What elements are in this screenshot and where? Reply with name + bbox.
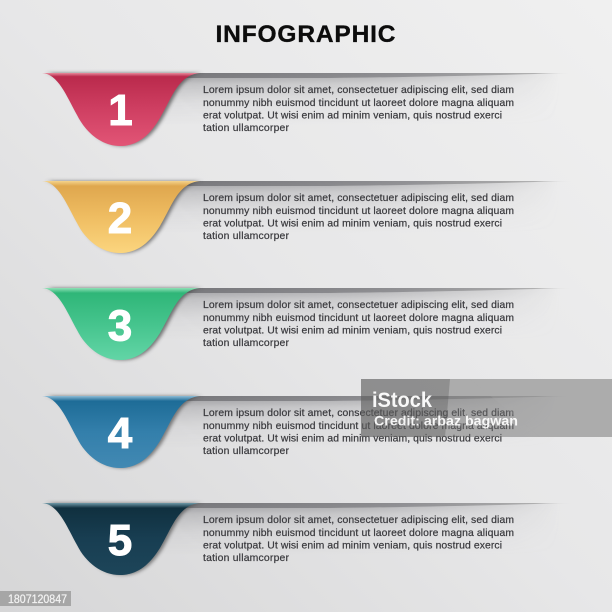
body text: tation ullamcorper [203, 553, 290, 564]
body text: erat volutpat. Ut wisi enim ad minim veniam, quis nostrud exerci [203, 110, 502, 122]
panel: step 3 [42, 288, 574, 360]
number: 2 [108, 194, 132, 243]
number: 5 [108, 516, 132, 565]
body text: Lorem ipsum dolor sit amet, consectetuer adipiscing elit, sed diam [203, 515, 514, 526]
tab shadow [45, 503, 203, 575]
body text: erat volutpat. Ut wisi enim ad minim veniam, quis nostrud exerci [203, 218, 502, 230]
body text [203, 515, 514, 564]
shadow band [172, 181, 561, 216]
body text: nonummy nibh euismod tincidunt ut laoreet dolore magna aliquam [203, 98, 514, 109]
body text: tation ullamcorper [203, 338, 290, 349]
panel: step 5 [42, 503, 574, 575]
body text [203, 85, 514, 134]
body text: erat volutpat. Ut wisi enim ad minim veniam, quis nostrud exerci [203, 434, 502, 444]
watermark: iStock credit: Credit: arbaz bagwan [374, 412, 518, 428]
tab: red [42, 73, 200, 146]
image id tag: 1807120847 [8, 594, 67, 606]
tab shadow [45, 396, 203, 468]
body text: tation ullamcorper [203, 123, 290, 134]
body text [203, 408, 514, 457]
tab: yellow [42, 181, 200, 253]
body text: Lorem ipsum dolor sit amet, consectetuer adipiscing elit, sed diam [203, 408, 514, 419]
body text: erat volutpat. Ut wisi enim ad minim veniam, quis nostrud exerci [203, 326, 502, 336]
shadow band [171, 73, 561, 108]
body text: nonummy nibh euismod tincidunt ut laoreet dolore magna aliquam [203, 528, 514, 539]
title: INFOGRAPHIC [216, 21, 396, 48]
tab shadow [45, 181, 203, 253]
panel: step 1 [42, 73, 574, 146]
body text: Lorem ipsum dolor sit amet, consectetuer adipiscing elit, sed diam [203, 85, 514, 96]
shadow band [172, 503, 560, 536]
body text: nonummy nibh euismod tincidunt ut laoreet dolore magna aliquam [203, 206, 514, 217]
number: 4 [108, 409, 133, 458]
panel: step 4 [42, 396, 574, 468]
tab: green [42, 288, 200, 360]
body text: tation ullamcorper [203, 446, 290, 457]
shadow band [172, 396, 554, 430]
number: 3 [108, 302, 132, 350]
tab: navy [42, 503, 200, 575]
panel: step 2 [42, 181, 574, 253]
tab shadow [45, 288, 203, 360]
body text: erat volutpat. Ut wisi enim ad minim veniam, quis nostrud exerci [203, 540, 502, 552]
body text: nonummy nibh euismod tincidunt ut laoreet dolore magna aliquam [203, 313, 514, 324]
watermark: iStock credit [361, 379, 612, 437]
shadow band [172, 288, 560, 324]
watermark: iStock credit: iStock [372, 389, 432, 412]
body text: nonummy nibh euismod tincidunt ut laoreet dolore magna aliquam [203, 421, 514, 432]
body text [203, 300, 514, 349]
tab: blue [42, 396, 200, 468]
number: 1 [108, 86, 133, 135]
body text: Lorem ipsum dolor sit amet, consectetuer adipiscing elit, sed diam [203, 193, 514, 204]
body text: tation ullamcorper [203, 231, 290, 242]
body text [203, 193, 514, 242]
body text: Lorem ipsum dolor sit amet, consectetuer adipiscing elit, sed diam [203, 300, 514, 311]
tab shadow [45, 73, 203, 146]
